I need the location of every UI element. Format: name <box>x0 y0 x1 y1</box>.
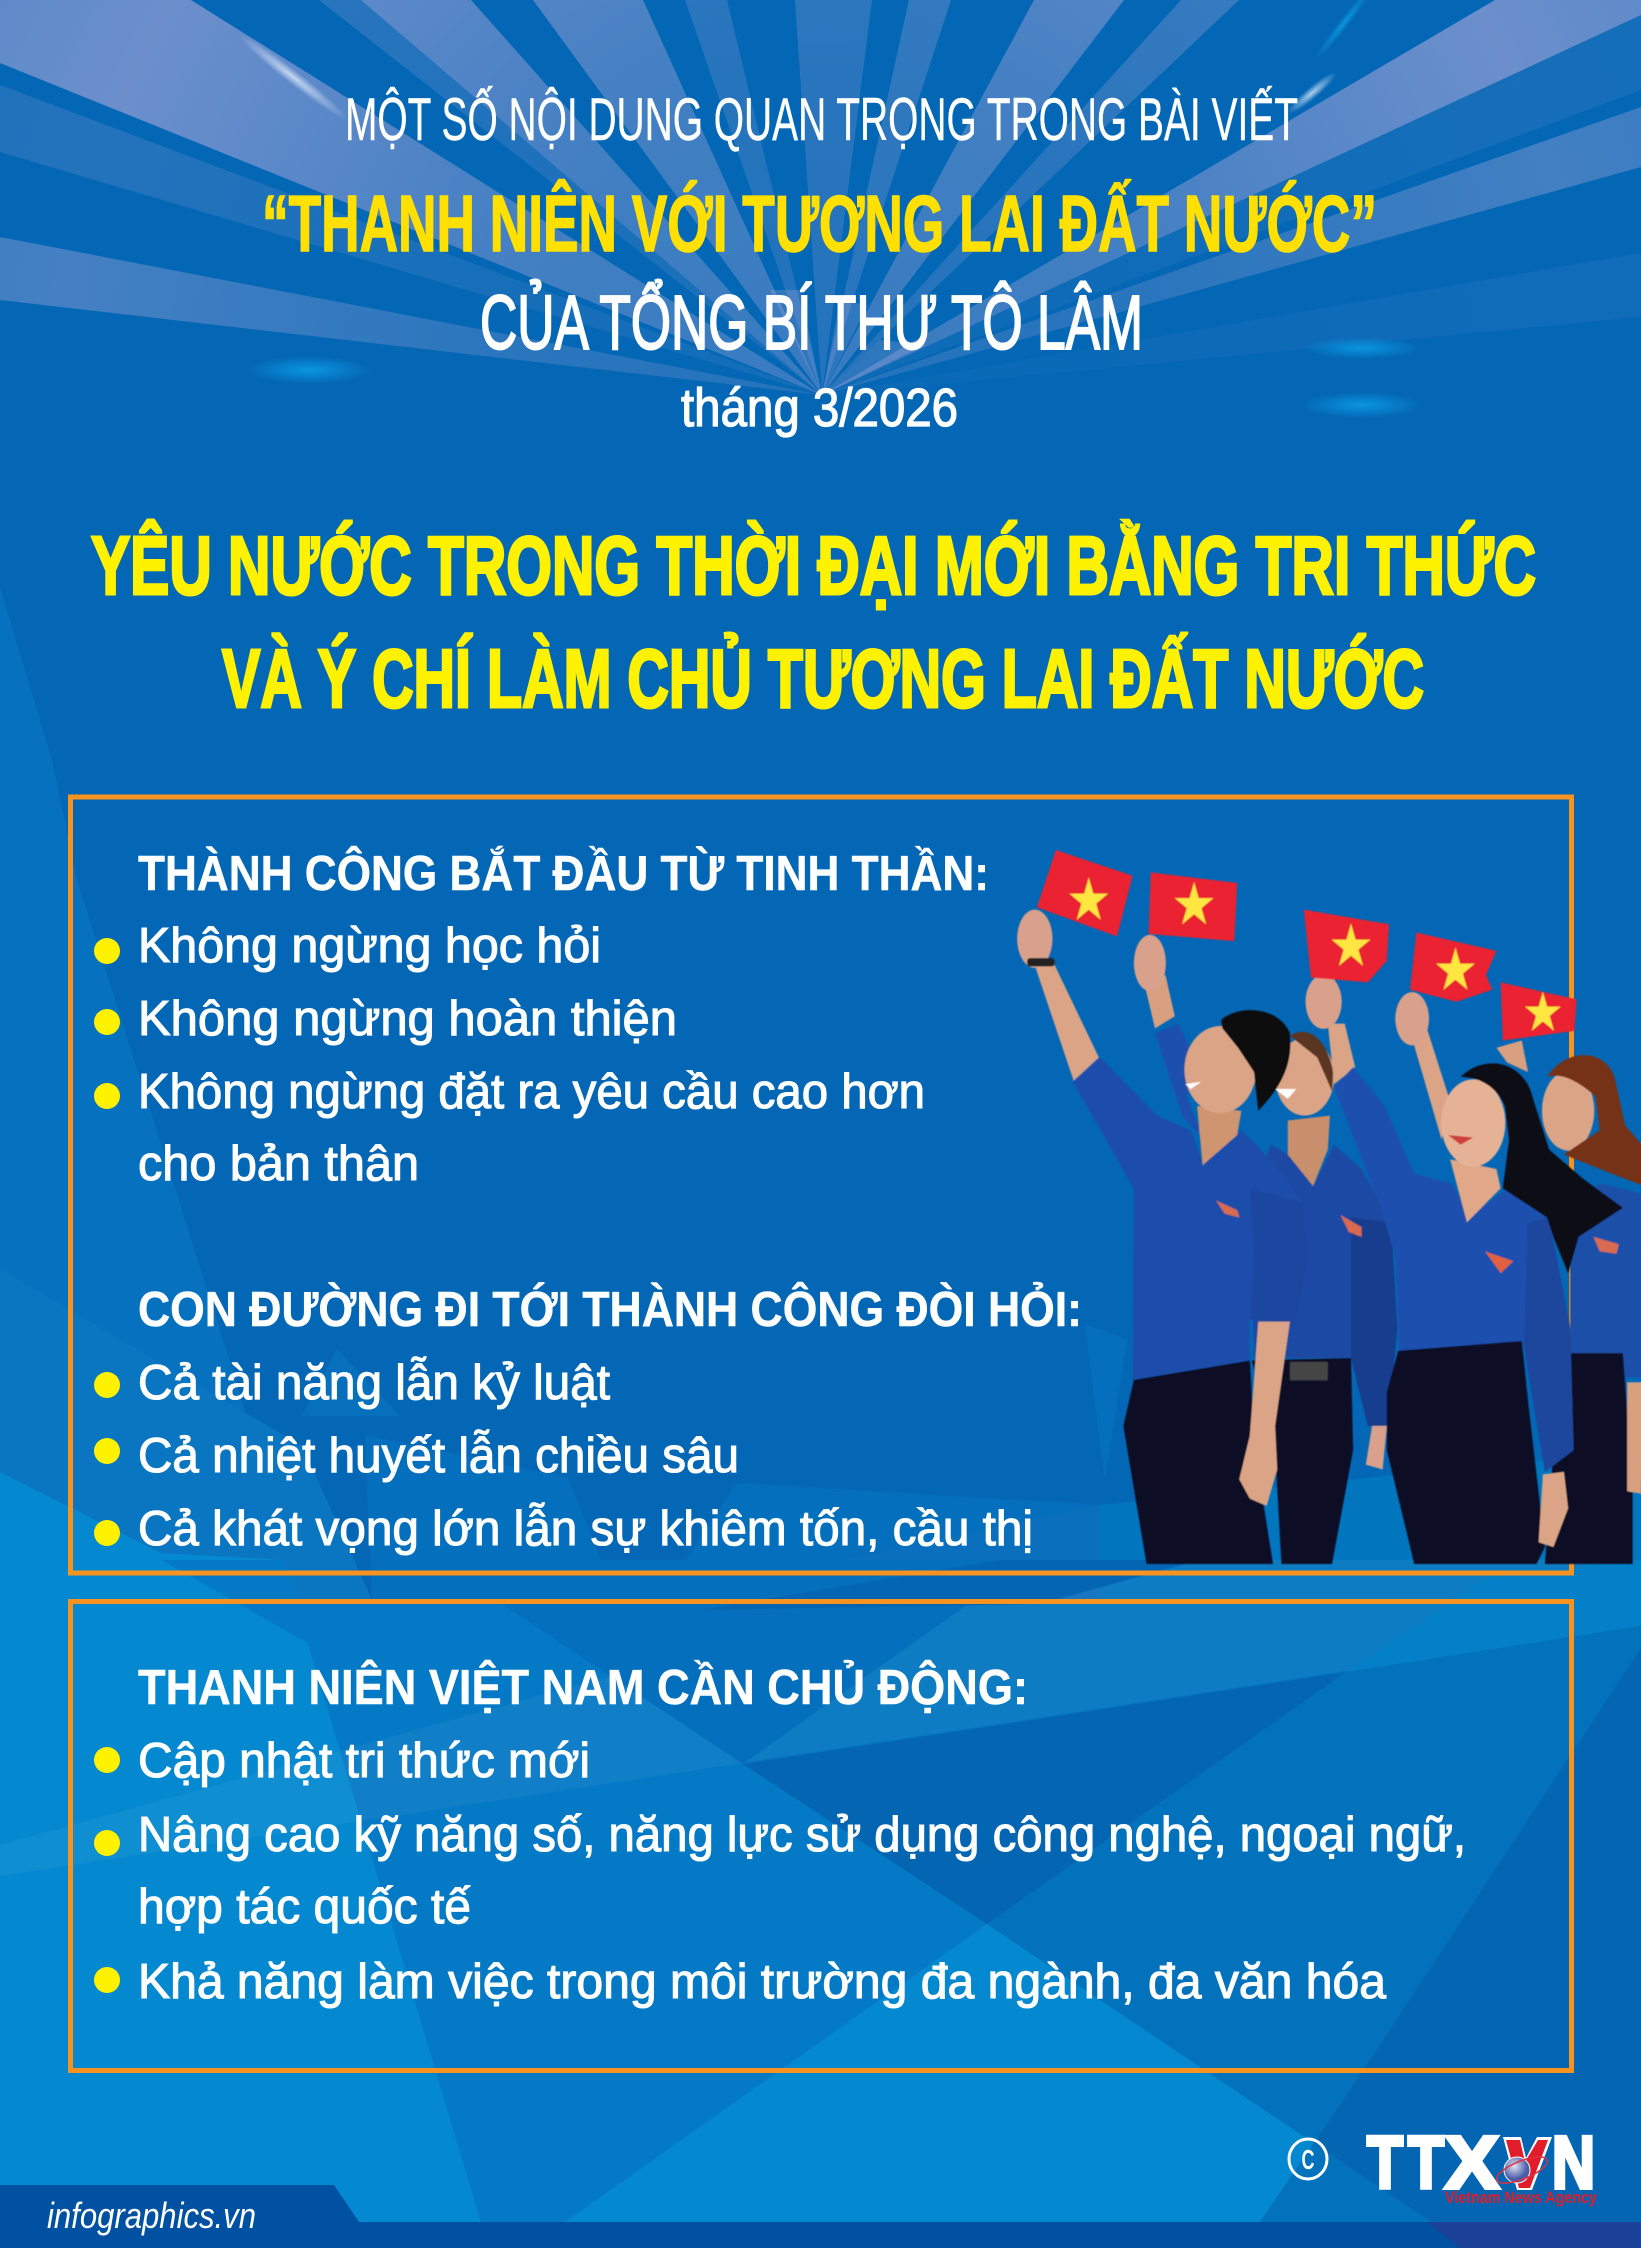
panel: what youth must proactively do <box>70 1602 1572 2070</box>
copyright symbol: C <box>1302 2144 1314 2175</box>
bullet item: Nâng cao kỹ năng số, năng lực sử dụng công nghệ, ngoại ngữ, <box>138 1808 1466 1862</box>
flag 1: ★ <box>1066 867 1111 932</box>
flag 4: ★ <box>1433 937 1478 1002</box>
TTXVN logo: Vietnam News Agency <box>1445 2188 1597 2207</box>
flag 3 <box>1304 910 1389 982</box>
illustration: youth union members waving flags <box>1017 850 1641 1564</box>
flag 5 <box>1501 982 1577 1042</box>
title: line 3: CỦA TỔNG BÍ THƯ TÔ LÂM <box>480 279 1143 366</box>
bullet item: Cả khát vọng lớn lẫn sự khiêm tốn, cầu thị <box>138 1502 1033 1556</box>
globe <box>1504 2157 1530 2183</box>
section heading: CON ĐƯỜNG ĐI TỚI THÀNH CÔNG ĐÒI HỎI: <box>138 1282 1082 1337</box>
TTXVN logo: T <box>1367 2121 1403 2204</box>
bullet item: Cập nhật tri thức mới <box>138 1734 590 1788</box>
TTXVN logo: N <box>1552 2121 1595 2204</box>
bullet item: cho bản thân <box>138 1137 419 1191</box>
flag 5: ★ <box>1522 982 1564 1042</box>
person 1 <box>1017 910 1309 1564</box>
bullet item: Không ngừng hoàn thiện <box>138 992 677 1046</box>
footer tab <box>0 2185 359 2248</box>
flag 1 <box>1037 850 1133 936</box>
footer site name: infographics.vn <box>47 2195 256 2236</box>
sun rays <box>0 0 1641 395</box>
person 2 <box>1134 935 1397 1564</box>
flag 3: ★ <box>1328 913 1374 978</box>
flag 4 <box>1410 932 1496 1002</box>
date: tháng 3/2026 <box>681 378 958 438</box>
bullet item: Không ngừng đặt ra yêu cầu cao hơn <box>138 1065 925 1119</box>
bullet item: Không ngừng học hỏi <box>138 919 601 973</box>
section heading: THÀNH CÔNG BẮT ĐẦU TỪ TINH THẦN: <box>138 846 989 901</box>
bullet item: Cả tài năng lẫn kỷ luật <box>138 1356 610 1410</box>
red V <box>1503 2137 1552 2190</box>
bullet item <box>94 1065 925 1191</box>
copyright symbol <box>1289 2139 1327 2179</box>
bullet item: Khả năng làm việc trong môi trường đa ngành, đa văn hóa <box>138 1955 1387 2009</box>
flag 2 <box>1149 872 1237 941</box>
TTXVN logo <box>1367 2121 1597 2207</box>
bullet item <box>94 1808 1466 1934</box>
person 3 <box>1305 975 1623 1564</box>
bullet item: hợp tác quốc tế <box>138 1880 471 1934</box>
person 4 <box>1496 1041 1641 1564</box>
panel: success begins with spirit <box>70 797 1572 1573</box>
TTXVN logo: X <box>1445 2121 1499 2204</box>
light spots <box>234 0 1422 418</box>
section heading: THANH NIÊN VIỆT NAM CẦN CHỦ ĐỘNG: <box>138 1660 1028 1715</box>
footer band <box>0 2222 1641 2248</box>
lower geometric shapes <box>0 587 1641 2222</box>
bullet item: Cả nhiệt huyết lẫn chiều sâu <box>138 1429 739 1483</box>
flag 2: ★ <box>1171 872 1217 937</box>
person 3 raised arm behind <box>1395 992 1450 1140</box>
TTXVN logo: T <box>1408 2121 1444 2204</box>
